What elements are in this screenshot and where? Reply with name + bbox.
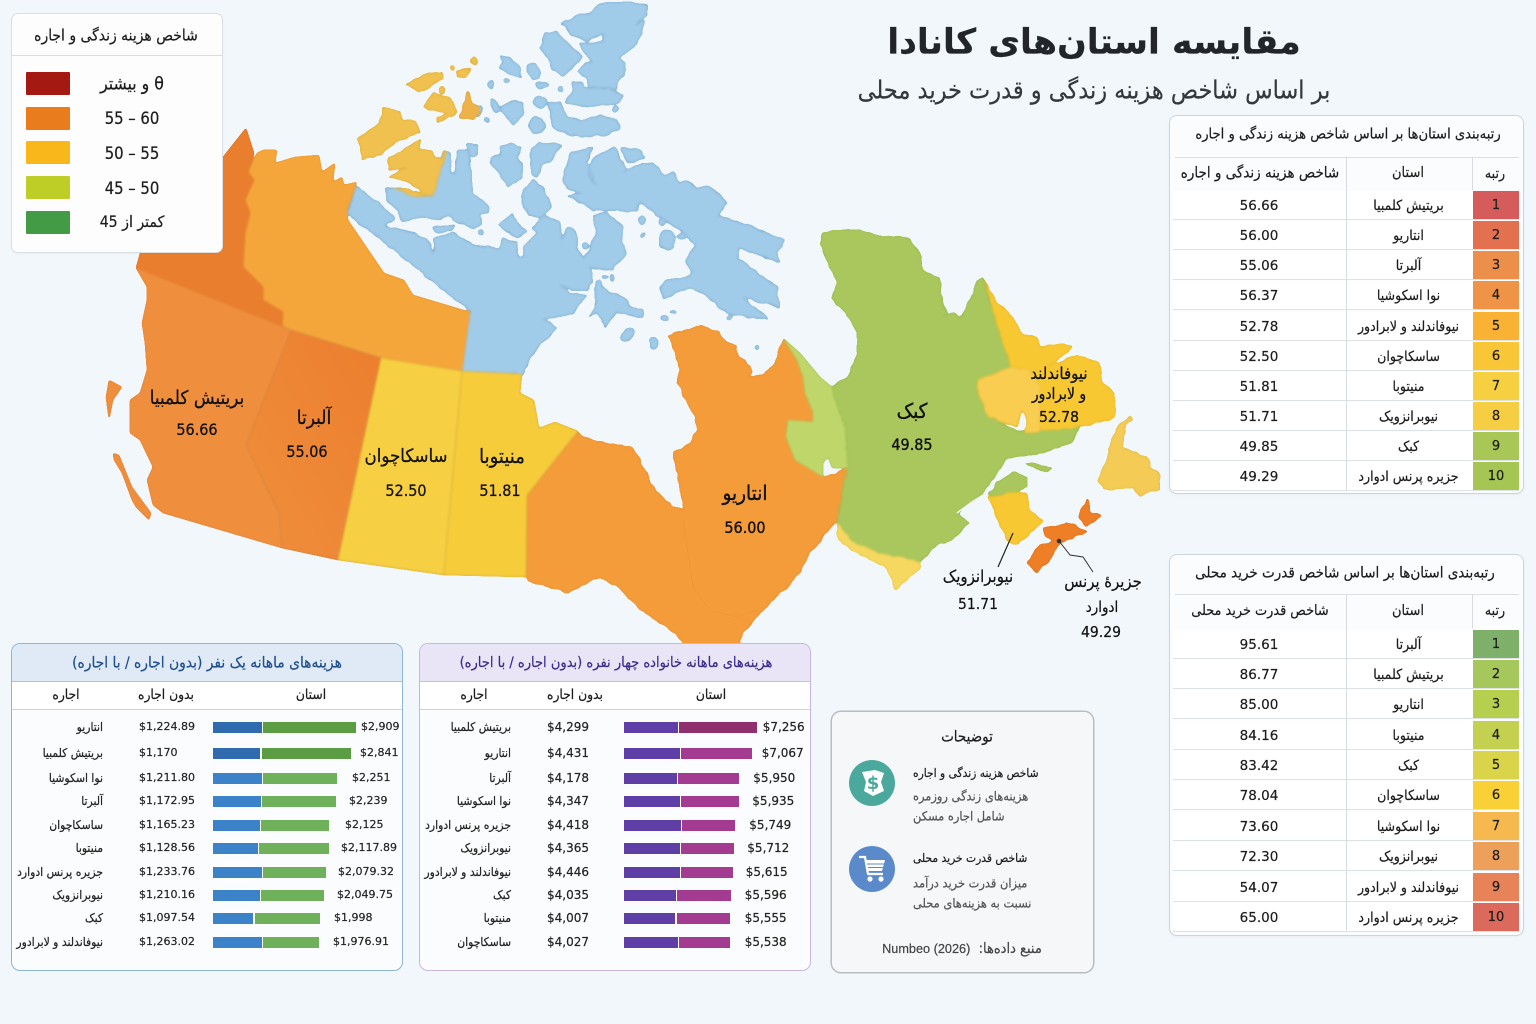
row: Quebec: $1,998: [334, 911, 372, 924]
row 8: نیوبرانزویک: [1379, 849, 1438, 865]
row: Ontario: $1,224.89: [139, 720, 195, 733]
row 8: [1173, 402, 1519, 430]
legend item: 50-55: [26, 141, 159, 164]
row 10: [1173, 903, 1519, 931]
row 4: 84.16: [1240, 728, 1278, 744]
map label: Quebec: 49.85: [891, 435, 933, 454]
row: Newfoundland and Labrador: نیوفاندلند و لابرادور: [424, 865, 511, 879]
row: British Columbia: [451, 720, 805, 734]
column headers: بدون اجاره: [138, 687, 194, 703]
row 5: نیوفاندلند و لابرادور: [1358, 319, 1459, 335]
notes heading: توضیحات: [941, 728, 993, 746]
panel: legend: [12, 14, 222, 252]
row: New Brunswick: $1,210.16: [139, 888, 195, 901]
map label: Manitoba: 51.81: [479, 481, 521, 500]
row: Alberta: [489, 770, 795, 786]
province: British Columbia: [106, 268, 291, 548]
row 6: 78.04: [1240, 788, 1278, 804]
row: British Columbia: بریتیش کلمبیا: [451, 720, 511, 734]
row: Manitoba: منیتوبا: [76, 841, 103, 855]
subtitle: بر اساس شاخص هزینه زندگی و قدرت خرید محلی: [858, 76, 1330, 104]
row: Quebec: کبک: [85, 911, 103, 925]
title: مقایسه استان‌های کانادا: [887, 22, 1301, 62]
row: Ontario: [76, 720, 400, 734]
map label: Manitoba: منیتوبا: [479, 444, 525, 468]
row 6: [1173, 781, 1519, 809]
column headers: اجاره: [52, 687, 80, 703]
row 8: 72.30: [1240, 849, 1278, 865]
row 6: ساسکاچوان: [1377, 349, 1440, 365]
table header row: [1191, 603, 1505, 619]
row 7: 73.60: [1240, 819, 1278, 835]
map label: British Columbia: بریتیش کلمبیا: [150, 388, 244, 409]
row: Quebec: $1,097.54: [139, 911, 195, 924]
panel heading: هزینه‌های ماهانه یک نفر (بدون اجاره / با اجاره): [72, 653, 342, 671]
row: British Columbia: [43, 746, 398, 760]
row: Ontario: $4,431: [547, 746, 589, 760]
province: Quebec western pocket: [783, 338, 848, 477]
row 4: 4: [1492, 728, 1500, 743]
row: Manitoba: $4,007: [547, 911, 589, 925]
map label: Newfoundland and Labrador: 52.78: [1039, 408, 1079, 426]
row: Nova Scotia: نوا اسکوشیا: [457, 794, 511, 808]
province: Yukon: [136, 128, 283, 327]
map label: Manitoba: [479, 444, 525, 500]
map label: New Brunswick: 51.71: [958, 595, 998, 613]
column headers: [12, 682, 402, 710]
row: Nova Scotia: $5,935: [752, 794, 794, 808]
row: Manitoba: [76, 841, 397, 856]
column headers: استان: [696, 687, 726, 703]
row 1: بریتیش کلمبیا: [1373, 198, 1444, 214]
panel: purchasing power ranking table: [1170, 555, 1523, 935]
map label: Prince Edward Island: 49.29: [1081, 623, 1121, 641]
callout line: Prince Edward Island: [1057, 539, 1093, 572]
row: Saskatchewan: $1,165.23: [139, 818, 195, 831]
row: British Columbia: $4,299: [547, 720, 589, 734]
row 10: جزیره پرنس ادوارد: [1358, 469, 1459, 485]
row 3: 85.00: [1240, 697, 1278, 713]
legend item: 50-55: 50 – 55: [105, 144, 159, 163]
table header row: استان: [1392, 165, 1424, 181]
note text: purchasing power index: [913, 851, 1031, 911]
map label: British Columbia: 56.66: [176, 420, 218, 439]
row: Prince Edward Island: $4,418: [547, 818, 589, 832]
province: Nunavut and Arctic islands: [347, 2, 785, 374]
map label: Prince Edward Island: ادوارد: [1086, 598, 1118, 616]
row 1: آلبرتا: [1396, 637, 1421, 653]
row: New Brunswick: نیوبرانزویک: [460, 841, 511, 855]
row 8: 8: [1492, 409, 1500, 424]
legend item: 60 and more: θ و بیشتر: [100, 74, 164, 94]
map label: Newfoundland and Labrador: [1030, 363, 1088, 426]
row: Ontario: انتاریو: [77, 720, 103, 734]
panel heading: [12, 644, 402, 682]
row 4: 56.37: [1240, 288, 1278, 304]
legend item: 45-50: 45 – 50: [105, 179, 159, 198]
column headers: [420, 682, 810, 710]
legend item: 55-60: [26, 107, 159, 130]
icon: shopping cart: [849, 846, 895, 892]
row: Alberta: $2,239: [349, 794, 388, 807]
row 1: 56.66: [1240, 198, 1278, 214]
province: Manitoba: [444, 371, 578, 577]
row 9: 9: [1492, 439, 1500, 454]
legend item: 45-50: [26, 176, 159, 199]
row 4: منیتوبا: [1392, 728, 1424, 744]
row 10: 10: [1488, 910, 1504, 925]
map label: Saskatchewan: ساسکاچوان: [365, 446, 447, 467]
row 8: نیوبرانزویک: [1379, 409, 1438, 425]
row: Ontario: $2,909: [361, 720, 400, 733]
row: Quebec: [493, 888, 787, 902]
row 10: جزیره پرنس ادوارد: [1358, 910, 1459, 926]
map label: Prince Edward Island: جزیرهٔ پرنس: [1064, 572, 1142, 592]
row 5: 52.78: [1240, 319, 1278, 335]
row 6: 52.50: [1240, 349, 1278, 365]
row: Prince Edward Island: $2,079.32: [338, 865, 394, 878]
row: Nova Scotia: [49, 771, 390, 786]
row 10: 65.00: [1240, 910, 1278, 926]
row: Newfoundland and Labrador: $4,446: [547, 865, 589, 879]
note text: cost of living index: شاخص هزینه زندگی و اجاره: [913, 766, 1039, 780]
map label: Ontario: 56.00: [724, 518, 766, 537]
legend item: under 45: [26, 211, 164, 234]
legend item: 60 and more: [26, 72, 164, 95]
row: Nova Scotia: $1,211.80: [139, 771, 195, 784]
panel heading: هزینه‌های ماهانه خانواده چهار نفره (بدون اجاره / با اجاره): [460, 655, 772, 671]
row 4: [1173, 721, 1519, 749]
row: New Brunswick: [460, 841, 789, 856]
row: Saskatchewan: ساسکاچوان: [457, 935, 511, 949]
row 9: 49.85: [1240, 439, 1278, 455]
row 5: [1173, 751, 1519, 779]
map label: Newfoundland and Labrador: نیوفاندلند: [1030, 363, 1088, 383]
province: Saskatchewan: [338, 358, 462, 575]
row: Prince Edward Island: [17, 865, 394, 880]
row 2: انتاریو: [1393, 228, 1424, 244]
row 5: [1173, 312, 1519, 340]
row: Prince Edward Island: [425, 818, 791, 832]
row 6: 6: [1492, 349, 1500, 364]
province: Newfoundland island: [1098, 415, 1160, 497]
province: western Arctic islands (yellow): [357, 57, 480, 197]
row: Quebec: $5,596: [745, 888, 787, 902]
table header row: استان: [1392, 603, 1424, 619]
row: Saskatchewan: $5,538: [745, 935, 787, 949]
row: Prince Edward Island: جزیره پرنس ادوارد: [425, 818, 511, 832]
row: Alberta: آلبرتا: [81, 794, 103, 808]
note text: cost of living index: هزینه‌های زندگی روزمره: [913, 789, 1028, 804]
row 7: 51.81: [1240, 379, 1278, 395]
province: Northwest Territories: [243, 150, 470, 371]
panel heading: [420, 644, 810, 682]
map label: Quebec: کبک: [897, 399, 928, 423]
row 2: 86.77: [1240, 667, 1278, 683]
row 5: کبک: [1398, 758, 1419, 774]
row: Alberta: $5,950: [753, 771, 795, 785]
row 1: 1: [1492, 198, 1500, 213]
row 7: نوا اسکوشیا: [1377, 819, 1440, 835]
table heading: رتبه‌بندی استان‌ها بر اساس شاخص قدرت خرید محلی: [1195, 564, 1495, 582]
province: Labrador: [978, 280, 1115, 432]
row: Prince Edward Island: $5,749: [749, 818, 791, 832]
row 7: منیتوبا: [1392, 379, 1424, 395]
row 5: 5: [1492, 758, 1500, 773]
table header row: [1181, 164, 1505, 182]
row 1: [1173, 191, 1519, 219]
panel: family of four monthly costs: [420, 644, 810, 970]
row: Newfoundland and Labrador: [424, 865, 788, 880]
row: New Brunswick: نیوبرانزویک: [52, 888, 103, 902]
row 2: [1173, 221, 1519, 249]
row 2: [1173, 660, 1519, 688]
row 9: [1173, 432, 1519, 460]
row: New Brunswick: $5,712: [747, 841, 789, 855]
row 9: نیوفاندلند و لابرادور: [1358, 880, 1459, 896]
row 4: 4: [1492, 288, 1500, 303]
row: Alberta: $4,178: [547, 771, 589, 785]
legend item: under 45: کمتر از 45: [100, 212, 164, 231]
panel: cost of living ranking table: [1170, 116, 1523, 493]
map label: Ontario: [721, 481, 768, 537]
map label: Alberta: 55.06: [286, 442, 328, 461]
row 9: 54.07: [1240, 880, 1278, 896]
row: Prince Edward Island: $1,233.76: [139, 865, 195, 878]
river: St Lawrence: [957, 492, 988, 513]
table header row: شاخص هزینه زندگی و اجاره: [1181, 164, 1339, 182]
column headers: اجاره: [460, 687, 488, 703]
note text: purchasing power index: میزان قدرت خرید درآمد: [913, 876, 1027, 891]
icon: dollar shield: [849, 760, 895, 806]
row: Saskatchewan: $2,125: [345, 818, 384, 831]
map label: Newfoundland and Labrador: و لابرادور: [1031, 385, 1086, 404]
map shapes: [106, 2, 1160, 650]
row 10: 10: [1488, 469, 1504, 484]
table header row: شاخص قدرت خرید محلی: [1191, 603, 1329, 619]
row 8: 8: [1492, 849, 1500, 864]
row: British Columbia: بریتیش کلمبیا: [43, 746, 103, 760]
map label: Ontario: انتاریو: [721, 481, 768, 505]
map label: Alberta: [286, 405, 333, 461]
row: Manitoba: [484, 911, 787, 926]
table header row: رتبه: [1485, 166, 1505, 182]
row: Nova Scotia: $2,251: [352, 771, 390, 784]
column headers: استان: [296, 687, 326, 703]
row: Newfoundland and Labrador: $5,615: [746, 865, 788, 879]
row 2: 56.00: [1240, 228, 1278, 244]
row: Saskatchewan: $4,027: [547, 935, 589, 949]
table heading: رتبه‌بندی استان‌ها بر اساس شاخص هزینه زندگی و اجاره: [1195, 126, 1501, 143]
row: Saskatchewan: [457, 935, 787, 950]
row: British Columbia: $7,256: [763, 720, 805, 734]
row 7: [1173, 372, 1519, 400]
province: Alberta: [246, 330, 381, 560]
Ontario internal boundary line: [683, 520, 757, 617]
row 5: 5: [1492, 319, 1500, 334]
row 9: [1173, 873, 1519, 901]
row: New Brunswick: [52, 888, 393, 902]
row 4: [1173, 281, 1519, 309]
row 5: 83.42: [1240, 758, 1278, 774]
row: Newfoundland and Labrador: نیوفاندلند و لابرادور: [16, 935, 103, 949]
row 8: 51.71: [1240, 409, 1278, 425]
map label: Alberta: آلبرتا: [297, 405, 333, 429]
row 9: 9: [1492, 880, 1500, 895]
row 7: 7: [1492, 379, 1500, 394]
row 6: 6: [1492, 788, 1500, 803]
row: Quebec: [85, 911, 372, 925]
row 6: ساسکاچوان: [1377, 788, 1440, 804]
note text: cost of living index: [913, 766, 1039, 824]
row 6: [1173, 342, 1519, 370]
row 3: آلبرتا: [1396, 258, 1421, 274]
row 3: 3: [1492, 258, 1500, 273]
row: Saskatchewan: [49, 818, 384, 832]
note text: purchasing power index: نسبت به هزینه‌های محلی: [913, 896, 1031, 911]
row: Nova Scotia: [457, 794, 794, 808]
row: Alberta: [81, 794, 388, 808]
row: Nova Scotia: نوا اسکوشیا: [49, 771, 103, 785]
table header row: رتبه: [1485, 603, 1505, 619]
province: Quebec: [820, 230, 1080, 562]
province: Ontario: [526, 325, 848, 650]
province: New Brunswick: [988, 492, 1043, 545]
row 10: [1173, 462, 1519, 490]
column headers: بدون اجاره: [547, 687, 603, 703]
row 1: 95.61: [1240, 637, 1278, 653]
map label: British Columbia: [150, 388, 244, 439]
row 3: [1173, 251, 1519, 279]
row: Newfoundland and Labrador: $1,263.02: [139, 935, 195, 948]
row 10: 49.29: [1240, 469, 1278, 485]
row 3: [1173, 690, 1519, 718]
province: southern strip: [837, 523, 920, 590]
row: Newfoundland and Labrador: $1,976.91: [333, 935, 389, 948]
data source: منبع داده‌ها: Numbeo (2026): [882, 941, 1042, 957]
row: Quebec: کبک: [493, 888, 511, 902]
row 1: [1173, 630, 1519, 658]
row: Prince Edward Island: جزیره پرنس ادوارد: [17, 865, 103, 879]
row: Alberta: $1,172.95: [139, 794, 195, 807]
panel: single person monthly costs: [12, 644, 402, 970]
row: Manitoba: $5,555: [745, 911, 787, 925]
row: Newfoundland and Labrador: [16, 935, 389, 950]
map label: Prince Edward Island: [1064, 572, 1142, 641]
row: British Columbia: $2,841: [360, 746, 398, 759]
row 2: 2: [1492, 667, 1500, 682]
note text: cost of living index: شامل اجاره مسکن: [913, 809, 1005, 824]
row 2: بریتیش کلمبیا: [1373, 667, 1444, 683]
row 3: انتاریو: [1393, 697, 1424, 713]
row 4: نوا اسکوشیا: [1377, 288, 1440, 304]
map label: New Brunswick: نیوبرانزویک: [943, 566, 1013, 586]
row 8: [1173, 842, 1519, 870]
map label: New Brunswick: [943, 566, 1013, 613]
row: Alberta: آلبرتا: [489, 771, 511, 785]
row 7: 7: [1492, 819, 1500, 834]
row: Ontario: انتاریو: [485, 746, 511, 760]
legend heading: شاخص هزینه زندگی و اجاره: [34, 26, 198, 44]
row: Quebec: $4,035: [547, 888, 589, 902]
row 7: [1173, 812, 1519, 840]
legend item: 55-60: 55 – 60: [105, 109, 159, 128]
row: Nova Scotia: $4,347: [547, 794, 589, 808]
icon: dollar shield: $: [867, 773, 879, 794]
row 3: 55.06: [1240, 258, 1278, 274]
map label: Saskatchewan: 52.50: [385, 481, 427, 500]
note text: purchasing power index: شاخص قدرت خرید محلی: [913, 851, 1027, 865]
row: Manitoba: $1,128.56: [139, 841, 195, 854]
row: New Brunswick: $4,365: [547, 841, 589, 855]
callout line: New Brunswick: [998, 533, 1013, 567]
panel: notes: [832, 712, 1093, 972]
row: Ontario: [484, 746, 804, 760]
row 3: 3: [1492, 697, 1500, 712]
province: Nova Scotia and PEI: [1027, 498, 1102, 573]
row: Saskatchewan: ساسکاچوان: [49, 818, 103, 832]
row 9: کبک: [1398, 439, 1419, 455]
row: Manitoba: $2,117.89: [341, 841, 397, 854]
row 1: 1: [1492, 637, 1500, 652]
row: New Brunswick: $2,049.75: [337, 888, 393, 901]
row: Ontario: $7,067: [762, 746, 804, 760]
row 2: 2: [1492, 228, 1500, 243]
row: Manitoba: منیتوبا: [484, 911, 511, 925]
map label: Quebec: [891, 399, 933, 454]
row: British Columbia: $1,170: [139, 746, 178, 759]
map label: Saskatchewan: [365, 446, 447, 500]
